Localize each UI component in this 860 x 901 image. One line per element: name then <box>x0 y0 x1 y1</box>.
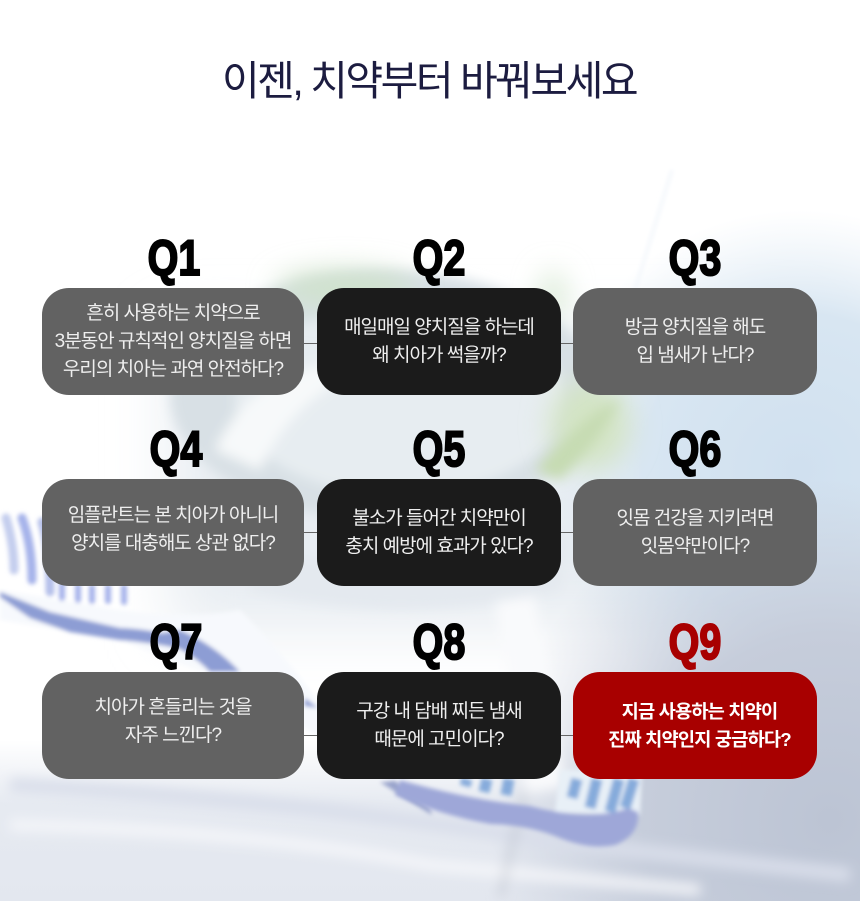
floor tile lines <box>10 600 850 898</box>
Q4 box <box>42 479 304 586</box>
Q1 label: Q1 <box>148 230 200 286</box>
Q7 label: Q7 <box>150 614 202 670</box>
Q3 box: 입 냄새가 난다? <box>636 344 754 366</box>
connector lines row 2 <box>304 532 573 533</box>
Q1 box: 3분동안 규칙적인 양치질을 하면 <box>55 330 291 352</box>
Q7 box: 치아가 흔들리는 것을 <box>95 697 251 718</box>
Q5 box: 충치 예방에 효과가 있다? <box>345 536 533 556</box>
Q2 box: 왜 치아가 썩을까? <box>372 344 506 366</box>
Q6 box <box>573 479 817 586</box>
Q9 box: 지금 사용하는 치약이 <box>622 700 777 722</box>
Q8 box: 구강 내 담배 찌든 냄새 <box>356 700 522 722</box>
Q8 box: 때문에 고민이다? <box>374 728 504 750</box>
Q5 label: Q5 <box>413 421 465 477</box>
Q5 box: 불소가 들어간 치약만이 <box>352 508 526 528</box>
Q2 box: 매일매일 양치질을 하는데 <box>344 316 534 338</box>
Q8 box <box>317 672 561 779</box>
Q4 label: Q4 <box>150 421 202 477</box>
Q3 box: 방금 양치질을 해도 <box>625 316 765 338</box>
Q6 box: 잇몸약만이다? <box>641 536 749 556</box>
Q1 box: 우리의 치아는 과연 안전하다? <box>63 358 283 380</box>
glass <box>170 270 600 610</box>
Q9 box: 진짜 치약인지 궁금하다? <box>608 728 791 750</box>
Q6 box: 잇몸 건강을 지키려면 <box>617 508 773 528</box>
connector lines row 3 <box>304 735 573 736</box>
Q6 label: Q6 <box>669 421 721 477</box>
right toothbrush <box>395 770 642 846</box>
Q4 box: 양치를 대충해도 상관 없다? <box>71 533 275 554</box>
Q3 box <box>573 288 817 395</box>
Q1 box: 흔히 사용하는 치약으로 <box>86 302 260 324</box>
Q9 label: Q9 <box>669 614 721 670</box>
Q9 box <box>573 672 817 779</box>
Q3 label: Q3 <box>669 230 721 286</box>
title: 이젠, 치약부터 바꿔보세요 <box>222 58 636 104</box>
Q8 label: Q8 <box>413 614 465 670</box>
Q7 box: 자주 느낀다? <box>125 725 221 746</box>
Q5 box <box>317 479 561 586</box>
connector lines row 1 <box>304 343 573 344</box>
Q4 box: 임플란트는 본 치아가 아니니 <box>68 505 278 526</box>
Q7 box <box>42 672 304 779</box>
left toothbrush <box>0 518 440 815</box>
leaves <box>275 270 630 470</box>
Q1 box <box>42 288 304 395</box>
Q2 box <box>317 288 561 395</box>
Q2 label: Q2 <box>413 230 465 286</box>
